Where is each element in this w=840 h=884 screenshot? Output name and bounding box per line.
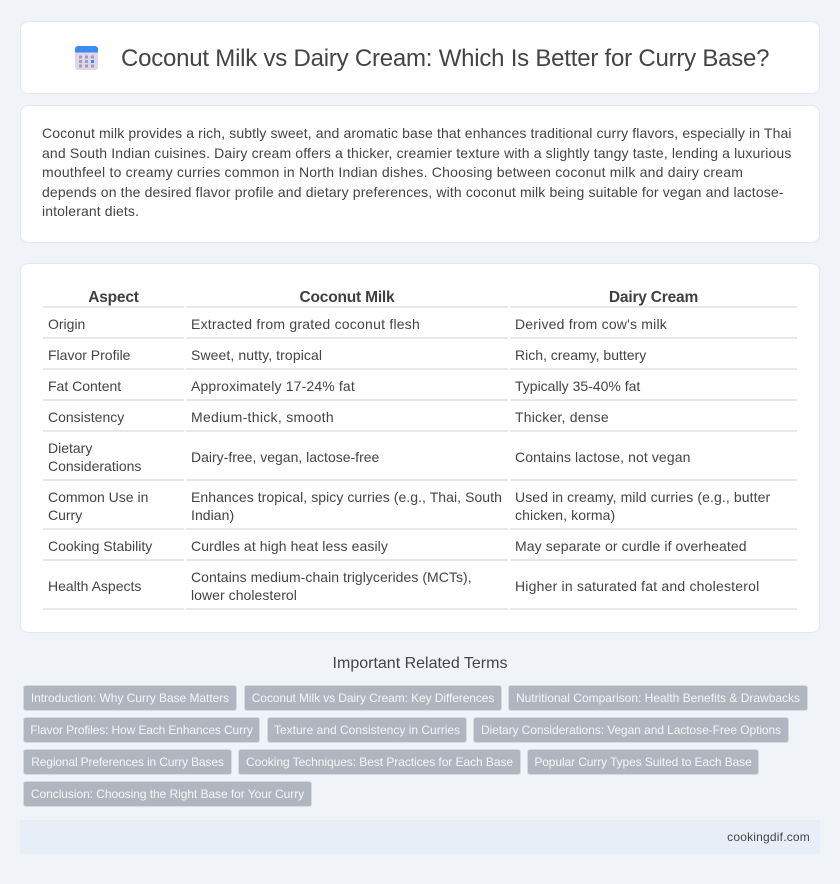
footer site name: cookingdif.com [727,830,810,844]
row: common use in curry: chicken, korma) [515,507,615,523]
chip: Flavor Profiles: How Each Enhances Curry [30,723,253,737]
row: origin [48,316,667,332]
chip [508,685,808,711]
row: origin: Derived from cow's milk [515,316,667,332]
chip [23,781,312,807]
row: consistency [48,409,609,425]
row: common use in curry: Enhances tropical, spicy curries (e.g., Thai, South [191,489,502,505]
chip [473,717,789,743]
row: flavor profile: Rich, creamy, buttery [515,347,646,363]
row: health aspects: Health Aspects [48,578,141,594]
row: flavor profile [48,347,646,363]
chip: Coconut Milk vs Dairy Cream: Key Differences [252,691,494,705]
chip: Introduction: Why Curry Base Matters [31,691,229,705]
row: common use in curry [48,489,770,523]
intro text: depends on the desired flavor profile and dietary preferences, with coconut milk being suitable for vegan and lactose- [42,184,784,200]
chip: Regional Preferences in Curry Bases [31,755,224,769]
row: common use in curry: Used in creamy, mild curries (e.g., butter [515,489,770,505]
chip [267,717,467,743]
row: health aspects: Higher in saturated fat and cholesterol [515,578,759,594]
row: common use in curry: Common Use in [48,489,148,505]
row: origin: Extracted from grated coconut flesh [191,316,420,332]
chip: Texture and Consistency in Curries [274,723,460,737]
row: fat content: Approximately 17-24% fat [191,378,355,394]
chip: Cooking Techniques: Best Practices for Each Base [246,755,513,769]
row: cooking stability: May separate or curdle if overheated [515,538,747,554]
row: cooking stability [48,538,747,554]
row: health aspects: Contains medium-chain triglycerides (MCTs), [191,569,472,585]
title: Coconut Milk vs Dairy Cream: Which Is Better for Curry Base? [121,45,769,72]
intro text [42,125,792,219]
chip [23,717,260,743]
row: fat content: Fat Content [48,378,121,394]
row: consistency: Consistency [48,409,124,425]
row: common use in curry: Indian) [191,507,234,523]
row: health aspects: lower cholesterol [191,587,297,603]
icon: calendar [75,46,98,70]
row: cooking stability: Cooking Stability [48,538,152,554]
panel: title header [20,21,820,94]
related terms chips [23,685,808,807]
row: consistency: Thicker, dense [515,409,609,425]
row: origin: Origin [48,316,85,332]
chip [244,685,502,711]
chip [23,749,232,775]
intro text: intolerant diets. [42,203,139,219]
row: dietary considerations [48,440,690,474]
row: fat content [48,378,640,394]
chip [527,749,759,775]
table header: Aspect [88,289,139,306]
panel: introduction [20,105,820,243]
chip: Nutritional Comparison: Health Benefits & Drawbacks [516,691,800,705]
row: common use in curry: Curry [48,507,82,523]
chip: Conclusion: Choosing the Right Base for Your Curry [31,787,304,801]
intro text: and South Indian cuisines. Dairy cream offers a thicker, creamier texture with a slightly tangy taste, lending a luxurious [42,145,792,161]
intro text: mouthfeel to creamy curries common in North Indian dishes. Choosing between coconut milk and dairy cream [42,164,743,180]
intro text: Coconut milk provides a rich, subtly sweet, and aromatic base that enhances traditional curry flavors, especially in Thai [42,125,792,141]
table header [88,289,698,306]
heading: important related terms: Important Related Terms [333,655,507,672]
row: fat content: Typically 35-40% fat [515,378,640,394]
table header: Coconut Milk [300,289,394,306]
chip [238,749,521,775]
row: dietary considerations: Contains lactose, not vegan [515,449,690,465]
row: consistency: Medium-thick, smooth [191,409,334,425]
footer bar [20,820,820,854]
chip: Popular Curry Types Suited to Each Base [534,755,752,769]
row: dietary considerations: Dairy-free, vegan, lactose-free [191,449,379,465]
row: health aspects [48,569,759,603]
chip: Dietary Considerations: Vegan and Lactose-Free Options [481,723,781,737]
row: flavor profile: Sweet, nutty, tropical [191,347,322,363]
row: cooking stability: Curdles at high heat less easily [191,538,388,554]
table header: Dairy Cream [609,289,698,306]
row: dietary considerations: Considerations [48,458,141,474]
row: flavor profile: Flavor Profile [48,347,130,363]
row: dietary considerations: Dietary [48,440,92,456]
chip [23,685,237,711]
panel: comparison table [20,263,820,633]
